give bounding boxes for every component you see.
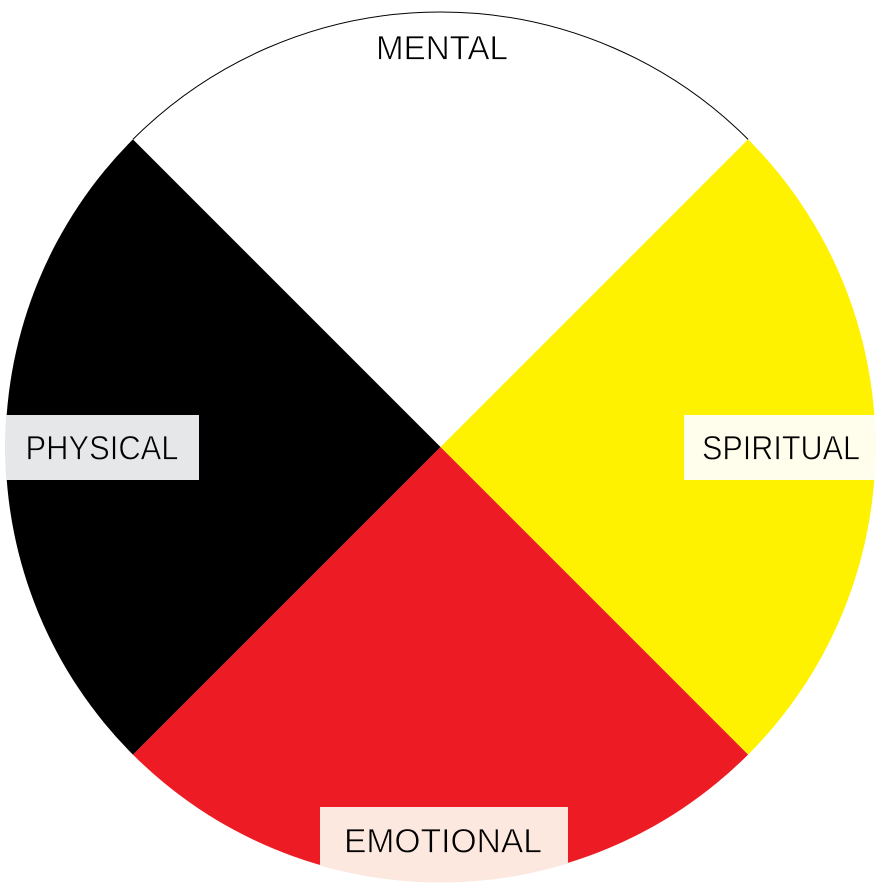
label: mental: MENTAL [376, 30, 508, 68]
label: spiritual [684, 415, 893, 480]
quadrant: emotional (red) [133, 447, 748, 882]
label: emotional: EMOTIONAL [344, 822, 542, 860]
quadrant: spiritual (yellow) [440, 139, 876, 755]
label: physical: PHYSICAL [26, 430, 178, 468]
circle outline on mental arc [133, 12, 748, 139]
label: physical [0, 415, 199, 480]
quadrant: mental (white) [133, 12, 748, 447]
quadrant: physical (black) [5, 139, 440, 755]
label: spiritual: SPIRITUAL [702, 430, 860, 468]
label: emotional [320, 807, 568, 882]
